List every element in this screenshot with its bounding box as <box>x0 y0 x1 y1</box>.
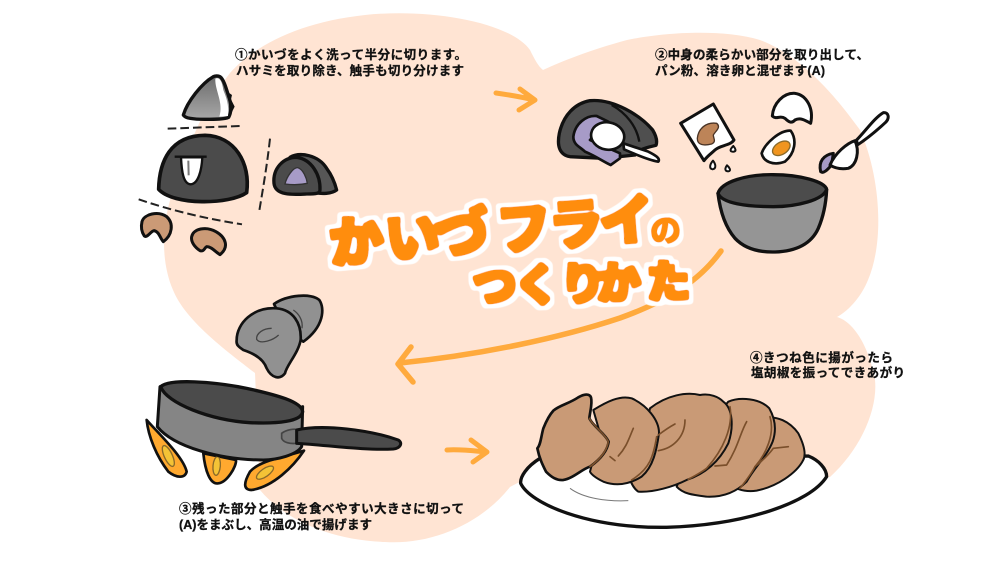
step 2 instruction text: ②中身の柔らかい部分を取り出して、 <box>655 47 869 62</box>
dashed cut lines <box>139 126 270 224</box>
icon: main body dome <box>159 135 247 202</box>
step 1 instruction text <box>235 47 467 78</box>
step 4 instruction text: 塩胡椒を振ってできあがり <box>751 365 905 380</box>
step 4 instruction text <box>750 350 905 380</box>
icon: flames <box>147 420 304 490</box>
background blob <box>164 13 878 542</box>
icon: halved shellfish <box>274 155 337 194</box>
icon: egg <box>762 131 794 163</box>
step 2 instruction text <box>655 47 869 78</box>
icon: frying pan <box>157 382 401 460</box>
step 3 illustration: frying <box>147 296 401 490</box>
step 3 instruction text: ③残った部分と触手を食べやすい大きさに切って <box>179 501 464 516</box>
icon: panko bag <box>681 104 735 171</box>
step 4 instruction text: ④きつね色に揚がったら <box>750 350 893 365</box>
icon: coated pieces <box>237 296 322 377</box>
arrow: step 1 to step 2 <box>496 89 535 110</box>
icon: serving spoon <box>820 113 888 172</box>
step 4 illustration: fried food on plate <box>521 394 827 527</box>
icon: fried cutlets <box>537 394 805 497</box>
icon: tentacle slices <box>141 214 225 255</box>
step 2 illustration: mixing <box>558 93 888 252</box>
title: つくりかた <box>472 257 691 312</box>
title: の <box>649 213 682 250</box>
step 1 illustration: cutting the shellfish <box>139 76 337 255</box>
icon: shell piece <box>183 76 235 119</box>
cutlet edge details <box>589 407 788 488</box>
arrow: step 3 to step 4 <box>447 440 487 462</box>
icon: shell scooped with spoon <box>558 100 659 165</box>
arrow: step 2 to step 3 <box>398 251 721 382</box>
icon: egg shell <box>772 93 811 123</box>
title <box>327 190 691 312</box>
icon: mixing bowl <box>718 175 827 252</box>
step 3 instruction text: (A)をまぶし、高温の油で揚げます <box>179 517 372 532</box>
icon: plate <box>521 456 827 527</box>
step 1 instruction text: ①かいづをよく洗って半分に切ります。 <box>235 47 467 62</box>
step 2 instruction text: パン粉、溶き卵と混ぜます(A) <box>655 63 825 78</box>
step 1 instruction text: ハサミを取り除き、触手も切り分けます <box>236 63 464 78</box>
step 3 instruction text <box>179 501 464 532</box>
title: かいづフライ <box>327 190 656 275</box>
